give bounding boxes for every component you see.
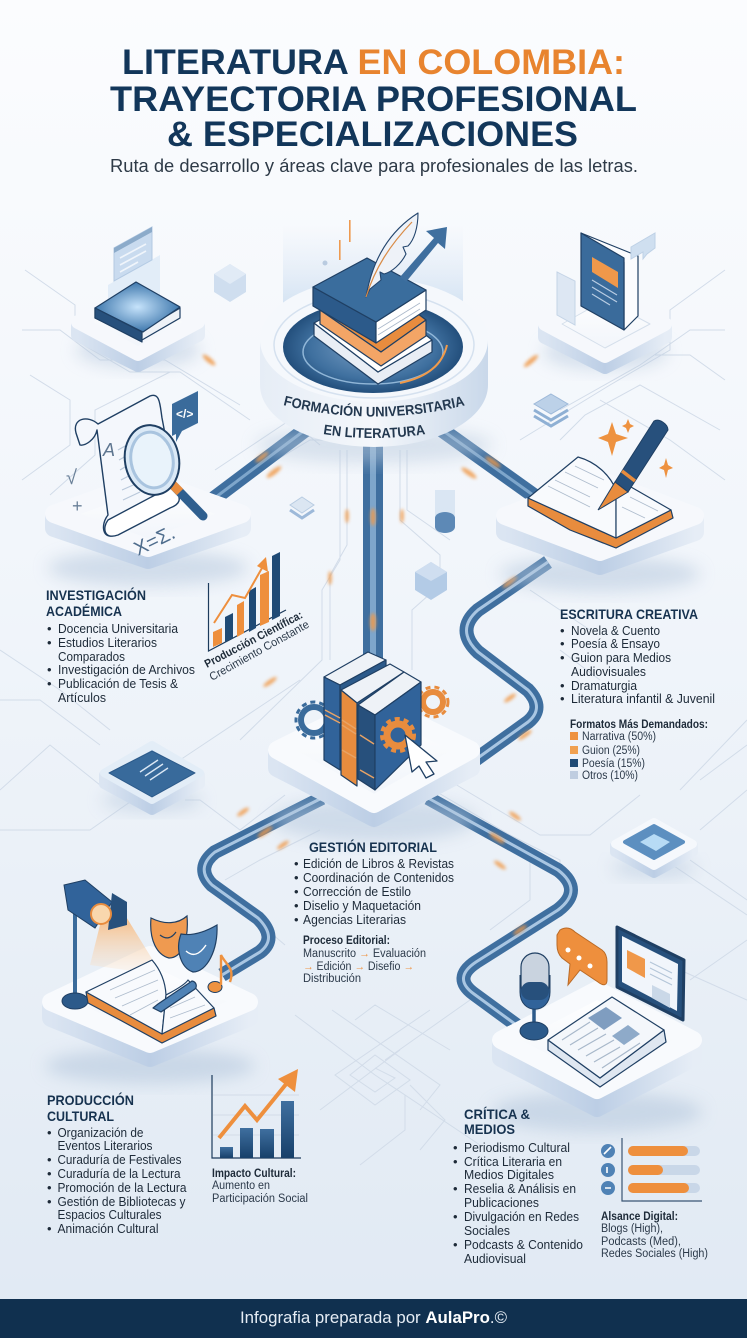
list: Comparados bbox=[58, 649, 125, 664]
platform bbox=[500, 480, 700, 592]
road: center to investigation bbox=[212, 430, 305, 500]
icon: theatre masks bbox=[151, 916, 217, 972]
list: Curaduría de Festivales bbox=[58, 1152, 182, 1167]
icon: hologram panel bbox=[108, 227, 160, 310]
sparks bbox=[322, 220, 351, 266]
list: Publicación de Tesis & bbox=[58, 676, 178, 691]
list: • bbox=[47, 662, 52, 677]
heading: PRODUCCIÓN bbox=[47, 1091, 134, 1108]
caption bbox=[212, 1168, 308, 1205]
list: Espacios Culturales bbox=[58, 1207, 162, 1222]
axes and grid bbox=[212, 1075, 301, 1158]
list: Literatura infantil & Juvenil bbox=[571, 691, 715, 706]
small platform: mail chip bbox=[612, 822, 696, 878]
list: • bbox=[453, 1181, 458, 1196]
process note: Manuscrito → Evaluación bbox=[303, 948, 426, 960]
list: Crítica Literaria en bbox=[464, 1154, 562, 1169]
road: center to writing bbox=[442, 430, 540, 500]
trend arrow bbox=[219, 1069, 298, 1138]
icon: fountain pen bbox=[598, 420, 668, 510]
list: • bbox=[294, 912, 299, 927]
platform disc bbox=[256, 278, 492, 463]
math symbols: + bbox=[72, 496, 83, 516]
list: • bbox=[560, 623, 565, 638]
list: • bbox=[453, 1209, 458, 1224]
small platform: document chip bbox=[102, 745, 202, 812]
icon: glowing book bbox=[95, 282, 180, 342]
list: Promoción de la Lectura bbox=[58, 1180, 187, 1195]
heading bbox=[464, 1106, 530, 1137]
chart: alcance digital bbox=[601, 1138, 708, 1260]
list: • bbox=[294, 870, 299, 885]
list bbox=[560, 623, 715, 706]
title bbox=[110, 43, 637, 154]
icon: code bubble: </> bbox=[176, 407, 193, 421]
panel: top-right book platform bbox=[543, 233, 667, 370]
icon: magnifier bbox=[119, 421, 203, 516]
caption: Impacto Cultural: bbox=[212, 1168, 296, 1180]
list: • bbox=[453, 1140, 458, 1155]
icon: growth arrow bbox=[400, 227, 447, 282]
caption: Crecimiento Constante bbox=[208, 619, 311, 684]
axes bbox=[208, 583, 286, 651]
platform bbox=[272, 702, 476, 842]
caption: Podcasts (Med), bbox=[601, 1236, 681, 1248]
trend arrow bbox=[214, 557, 268, 623]
heading: ACADÉMICA bbox=[46, 603, 122, 619]
road: editorial to cultural bbox=[204, 798, 322, 975]
heading: CRÍTICA & bbox=[464, 1106, 530, 1122]
icon: tablet bbox=[617, 927, 684, 1020]
list: Podcasts & Contenido bbox=[464, 1237, 583, 1252]
icon: code bubble bbox=[172, 391, 198, 442]
process note bbox=[303, 935, 426, 985]
panel: central disc bbox=[257, 212, 491, 471]
floating cubes and stacks bbox=[214, 264, 568, 600]
heading: MEDIOS bbox=[464, 1121, 515, 1137]
icon: quill bbox=[366, 213, 418, 297]
list: Publicaciones bbox=[464, 1195, 539, 1210]
list: Reselia & Análisis en bbox=[464, 1181, 576, 1196]
list: Edición de Libros & Revistas bbox=[303, 856, 454, 871]
heading: ESCRITURA CREATIVA bbox=[560, 606, 698, 622]
panel: crítica y medios bbox=[453, 927, 702, 1266]
label: formación universitaria bbox=[284, 396, 465, 438]
icon: standing book bbox=[581, 233, 638, 330]
list: • bbox=[47, 621, 52, 636]
caption: Alsance Digital: bbox=[601, 1211, 678, 1223]
road: writing to editorial bbox=[466, 562, 548, 765]
legend: formatos bbox=[570, 719, 708, 782]
legend: formatos: Poesía (15%) bbox=[582, 758, 645, 770]
list: Guion para Medios bbox=[571, 650, 671, 665]
list: • bbox=[47, 1166, 52, 1181]
orange flow markers bbox=[201, 353, 540, 936]
math symbols bbox=[66, 467, 179, 560]
bars bbox=[220, 1101, 294, 1158]
heading: CULTURAL bbox=[47, 1108, 114, 1124]
list: Medios Digitales bbox=[464, 1167, 554, 1182]
process note: Proceso Editorial: bbox=[303, 935, 390, 947]
list: • bbox=[47, 1125, 52, 1140]
list bbox=[453, 1140, 583, 1266]
icon: music note bbox=[208, 955, 231, 992]
list: • bbox=[560, 650, 565, 665]
caption: Aumento en bbox=[212, 1180, 270, 1192]
list: • bbox=[560, 691, 565, 706]
list: Sociales bbox=[464, 1223, 510, 1238]
legend: formatos: Guion (25%) bbox=[582, 745, 640, 757]
list: • bbox=[47, 1221, 52, 1236]
list: Estudios Literarios bbox=[58, 635, 157, 650]
icon: open book bbox=[528, 457, 673, 548]
panel: top-left book platform bbox=[76, 227, 200, 368]
list: Dramaturgia bbox=[571, 678, 638, 693]
bars bbox=[213, 552, 280, 647]
list bbox=[294, 856, 454, 927]
list: • bbox=[560, 636, 565, 651]
chart: producción científica bbox=[203, 552, 311, 684]
label: formación universitaria: FORMACIÓN UNIVERSITARIA bbox=[284, 396, 465, 417]
list: Animación Cultural bbox=[58, 1221, 159, 1236]
math symbols: √ bbox=[66, 467, 77, 489]
panel: gestión editorial bbox=[272, 652, 476, 985]
icon: stack of books bbox=[313, 258, 432, 384]
legend: formatos: Narrativa (50%) bbox=[582, 731, 656, 743]
list: Investigación de Archivos bbox=[58, 662, 195, 677]
list: • bbox=[294, 884, 299, 899]
list: Agencias Literarias bbox=[303, 912, 406, 927]
list: Novela & Cuento bbox=[571, 623, 660, 638]
label: formación universitaria: EN LITERATURA bbox=[324, 424, 426, 438]
scroll letter: A bbox=[102, 440, 115, 460]
bar tracks and values bbox=[628, 1146, 700, 1193]
list bbox=[47, 1125, 187, 1236]
list bbox=[47, 621, 195, 705]
caption: Producción Científica: bbox=[203, 609, 305, 671]
heading: GESTIÓN EDITORIAL bbox=[309, 838, 437, 855]
list: Audiovisuales bbox=[571, 664, 646, 679]
list: • bbox=[294, 856, 299, 871]
subtitle: Ruta de desarrollo y áreas clave para profesionales de las letras. bbox=[110, 156, 638, 176]
list: • bbox=[47, 1180, 52, 1195]
list: Eventos Literarios bbox=[58, 1138, 153, 1153]
math symbols: X=Σ. bbox=[131, 522, 179, 560]
process note: Distribución bbox=[303, 973, 361, 985]
heading bbox=[47, 1091, 134, 1124]
platform bbox=[492, 990, 702, 1132]
list: • bbox=[453, 1237, 458, 1252]
icon: spotlight bbox=[62, 880, 162, 1009]
platform bbox=[48, 480, 248, 586]
platform bbox=[76, 290, 200, 368]
caption: Blogs (High), bbox=[601, 1223, 663, 1235]
icon: orange gear bbox=[382, 719, 414, 751]
icon: cursor bbox=[405, 735, 437, 778]
icon: upright books bbox=[324, 652, 421, 790]
list: Gestión de Bibliotecas y bbox=[58, 1194, 186, 1209]
chart: impacto cultural bbox=[212, 1069, 308, 1205]
caption: Participación Social bbox=[212, 1193, 308, 1205]
footer: Infografia preparada por AulaPro.© bbox=[240, 1309, 507, 1327]
icon: chat bubble bbox=[557, 928, 607, 985]
list: Periodismo Cultural bbox=[464, 1140, 570, 1155]
heading bbox=[46, 586, 146, 619]
panel: producción cultural bbox=[45, 880, 255, 1236]
footer bbox=[0, 1299, 747, 1338]
list: Curaduría de la Lectura bbox=[58, 1166, 181, 1181]
list: Diselio y Maquetación bbox=[303, 898, 421, 913]
panel: investigación académica bbox=[46, 391, 248, 705]
list: Corrección de Estilo bbox=[303, 884, 411, 899]
icon: gears bbox=[296, 687, 448, 738]
list: Docencia Universitaria bbox=[58, 621, 179, 636]
platform bbox=[45, 955, 255, 1084]
platform bbox=[543, 292, 667, 370]
icons: channels bbox=[601, 1144, 615, 1195]
icon: open book with pen bbox=[86, 960, 216, 1043]
light beam bbox=[283, 225, 463, 325]
list: • bbox=[294, 898, 299, 913]
road: center to editorial bbox=[363, 440, 383, 670]
road: editorial to media bbox=[428, 798, 571, 1035]
title: & ESPECIALIZACIONES bbox=[167, 115, 578, 154]
heading: INVESTIGACIÓN bbox=[46, 586, 146, 603]
legend: formatos: Otros (10%) bbox=[582, 770, 638, 782]
list: • bbox=[453, 1154, 458, 1169]
title: LITERATURA EN COLOMBIA: bbox=[122, 43, 625, 82]
icon: microphone bbox=[520, 953, 550, 1040]
caption bbox=[601, 1211, 708, 1260]
icon: mini list bbox=[557, 272, 575, 325]
list: Coordinación de Contenidos bbox=[303, 870, 454, 885]
list: Divulgación en Redes bbox=[464, 1209, 579, 1224]
list: • bbox=[47, 635, 52, 650]
list: Organización de bbox=[58, 1125, 144, 1140]
list: • bbox=[560, 678, 565, 693]
list: Poesía & Ensayo bbox=[571, 636, 660, 651]
icon: scroll bbox=[75, 395, 179, 536]
list: • bbox=[47, 1194, 52, 1209]
list: • bbox=[47, 676, 52, 691]
icon: chat bubble bbox=[631, 233, 655, 259]
list: Audiovisual bbox=[464, 1251, 526, 1266]
process note: → Edición → Disefio → bbox=[303, 961, 414, 973]
icon: newspaper bbox=[548, 997, 666, 1087]
axes bbox=[622, 1138, 702, 1201]
list: • bbox=[47, 1152, 52, 1167]
legend: formatos: Formatos Más Demandados: bbox=[570, 719, 708, 731]
title: TRAYECTORIA PROFESIONAL bbox=[110, 80, 637, 119]
list: Artículos bbox=[58, 690, 106, 705]
icon: stars bbox=[598, 419, 673, 478]
panel: escritura creativa bbox=[500, 419, 715, 782]
circuit background lines bbox=[0, 270, 747, 1165]
caption: Redes Sociales (High) bbox=[601, 1248, 708, 1260]
